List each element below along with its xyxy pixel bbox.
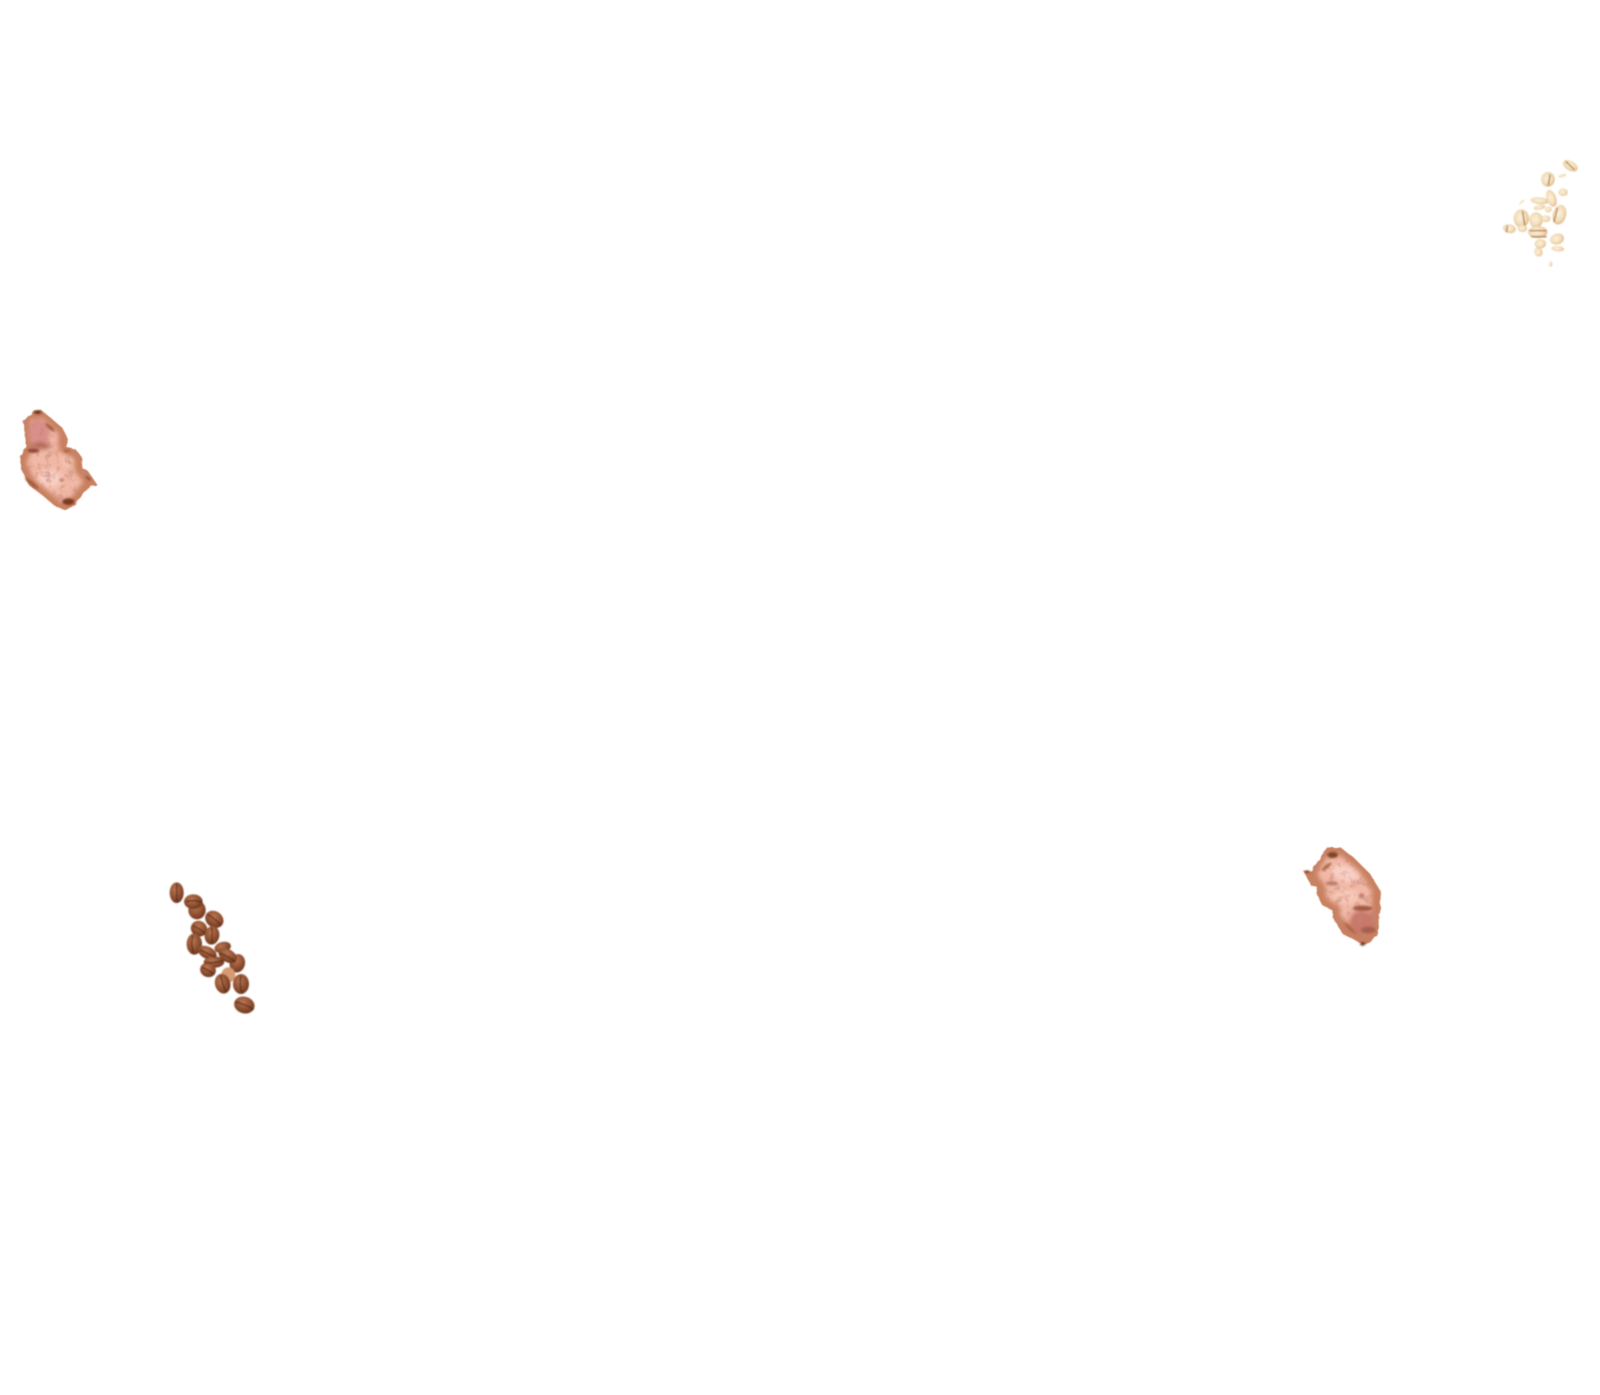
icon: bacon slice right <box>1305 848 1380 946</box>
icon: bacon slice left <box>21 411 96 509</box>
icon: oat flakes top right <box>1502 158 1580 266</box>
icon: coffee beans lower left <box>170 882 256 1016</box>
